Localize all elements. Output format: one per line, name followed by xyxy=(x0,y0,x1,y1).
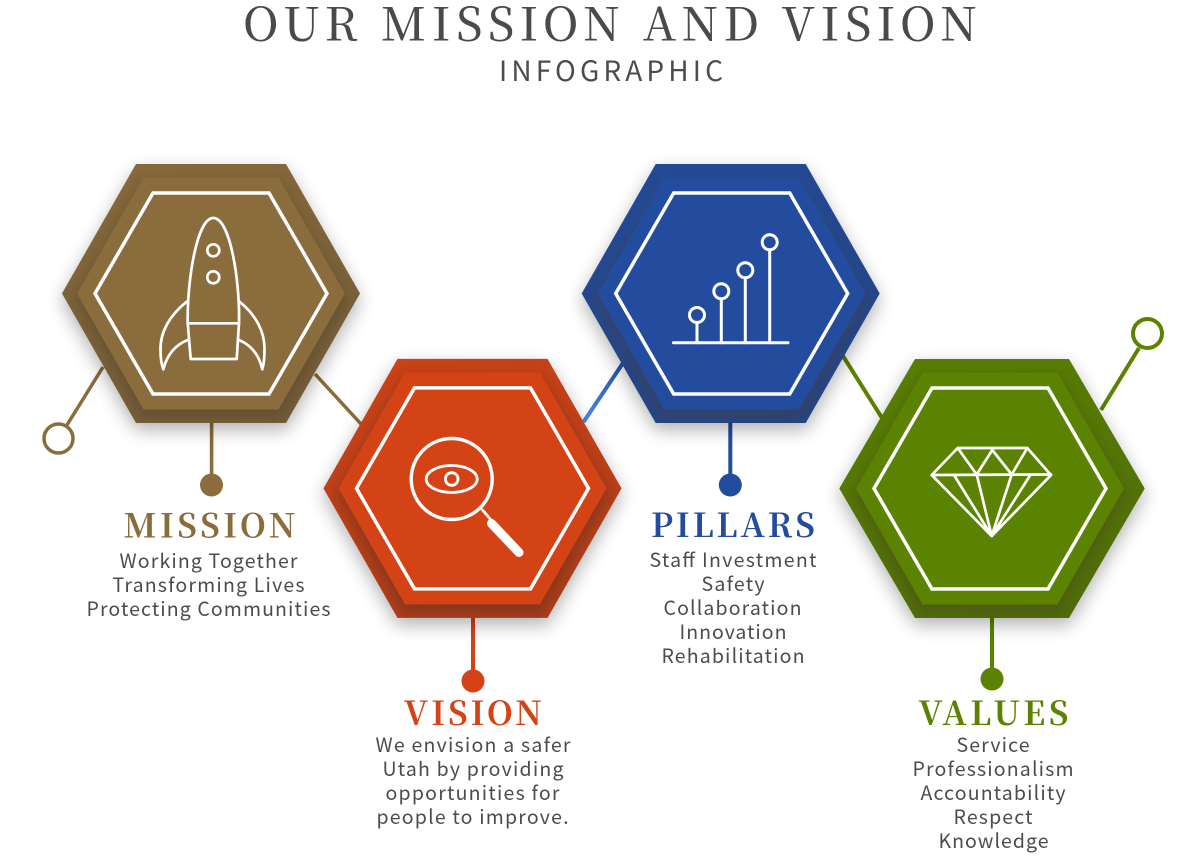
text block: vision: VISION xyxy=(404,688,542,735)
connector: pillars to values xyxy=(843,356,882,418)
text block: pillars: PILLARS xyxy=(651,500,815,547)
text block: values: Accountability xyxy=(920,777,1066,806)
text block: pillars: Safety xyxy=(702,568,764,597)
text block: values: Respect xyxy=(954,801,1033,830)
connector: mission to vision xyxy=(315,374,361,424)
text block: vision: Utah by providing xyxy=(382,753,564,782)
connector stem and dot: vision xyxy=(462,615,484,692)
subtitle: INFOGRAPHIC xyxy=(499,50,723,90)
text block: values: Knowledge xyxy=(938,825,1048,854)
text block: pillars: Collaboration xyxy=(664,592,802,621)
connector stem and dot: pillars xyxy=(719,420,742,496)
connector: values right with open circle xyxy=(1101,319,1162,410)
connector stem and dot: values xyxy=(980,615,1004,690)
text block: values: VALUES xyxy=(918,688,1068,735)
panel: values hexagon xyxy=(839,359,1145,625)
text block: mission: Working Together xyxy=(120,545,298,574)
panel: mission hexagon xyxy=(62,164,360,430)
text block: vision: We envision a safer xyxy=(376,729,571,758)
text block: mission xyxy=(86,500,330,622)
text block: vision xyxy=(376,688,571,830)
text block: vision: people to improve. xyxy=(376,801,568,830)
connector: mission left with open circle xyxy=(44,367,103,453)
connector stem and dot: mission xyxy=(200,420,223,496)
text block: values: Service xyxy=(956,729,1030,758)
icon: rocket xyxy=(160,218,265,369)
icon: lollipop bar chart xyxy=(674,235,788,343)
text block: mission: MISSION xyxy=(124,500,296,548)
text block: pillars: Staff Investment xyxy=(650,544,817,573)
text block: vision: opportunities for xyxy=(386,777,560,806)
panel: pillars hexagon xyxy=(582,164,880,430)
text block: mission: Transforming Lives xyxy=(112,569,304,598)
text block: values: Professionalism xyxy=(912,753,1074,782)
text block: values xyxy=(912,688,1074,854)
icon: magnifier with eye xyxy=(411,438,519,552)
panel: vision hexagon xyxy=(324,359,622,625)
text block: pillars xyxy=(650,500,817,669)
text block: pillars: Innovation xyxy=(680,616,786,645)
icon: diamond xyxy=(932,448,1051,536)
text block: pillars: Rehabilitation xyxy=(662,640,804,669)
text block: mission: Protecting Communities xyxy=(86,593,330,622)
connector: vision to pillars xyxy=(584,363,623,422)
